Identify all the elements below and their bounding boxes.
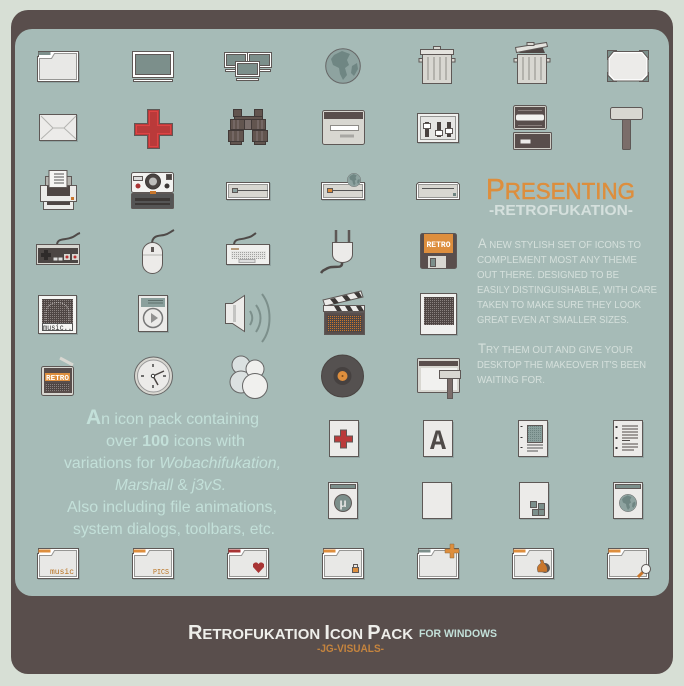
icon: keyboard	[226, 233, 271, 266]
text block: description: GREAT EVEN AT SMALLER SIZES.	[477, 314, 629, 326]
icon: globe	[326, 49, 360, 83]
icon: music image: music..	[43, 323, 72, 333]
icon: picture frame with corners	[608, 50, 648, 82]
text block: pack summary: Marshall & j3vS.	[115, 477, 226, 494]
text block: description: A NEW STYLISH SET OF ICONS TO	[478, 235, 641, 251]
icon: PNG image	[420, 294, 458, 336]
icon: new folder	[418, 544, 460, 580]
icon: floppy disk	[420, 234, 456, 268]
icon: vinyl record	[322, 355, 364, 397]
icon: music folder	[38, 548, 80, 580]
heading: Retrofukation subtitle: -RETROFUKATION-	[489, 203, 633, 219]
icon: media player	[138, 296, 169, 333]
icon: slider bar	[226, 182, 271, 201]
icon: clock	[134, 357, 172, 395]
icon: slider controls	[418, 114, 460, 144]
icon: favourites folder	[228, 548, 270, 580]
icon: window with hammer	[418, 358, 460, 398]
icon: trash can	[419, 46, 455, 84]
text block: description: COMPLEMENT MOST ANY THEME	[477, 254, 637, 266]
text block: description: DESKTOP THE MAKEOVER IT'S BEEN	[477, 359, 646, 371]
icon: red cross	[134, 110, 172, 148]
icon: power plug	[321, 230, 352, 273]
icon: clapperboard	[323, 291, 364, 334]
icon: font document	[424, 420, 454, 458]
text block: description: OUT THERE. DESIGNED TO BE	[477, 269, 619, 281]
text block: pack summary: variations for Wobachifukation,	[64, 455, 281, 472]
icon: blocks document	[520, 482, 550, 520]
icon: binoculars	[228, 110, 268, 144]
icon: notes with text	[614, 420, 644, 458]
inner teal panel	[15, 29, 669, 596]
icon: blank document	[422, 482, 453, 520]
icon: folder	[38, 52, 80, 83]
text block: description: EASILY DISTINGUISHABLE, WITH CARE	[477, 284, 657, 296]
text block: pack summary	[64, 406, 281, 538]
icon: notes with image	[518, 420, 549, 458]
icon: pictures folder: PICS	[153, 569, 169, 577]
icon: music folder: music	[50, 568, 74, 577]
icon: torrent document	[328, 482, 359, 520]
icon: optical drive	[416, 182, 460, 200]
footer platform note: FOR WINDOWS	[419, 628, 497, 640]
icon: mouse	[142, 230, 174, 274]
icon: instant camera	[132, 172, 174, 208]
icon: speaker	[226, 294, 270, 342]
icon: font document: A	[430, 427, 446, 458]
icon: hammer	[610, 108, 642, 150]
icon: radio	[42, 358, 74, 396]
icon: floppy disk: RETRO	[426, 241, 451, 250]
heading: Presenting: PRESENTING	[486, 174, 635, 206]
icon: open trash can	[514, 42, 550, 84]
text block: pack summary: over 100 icons with	[106, 433, 245, 450]
footer title: RETROFUKATION ICON PACK	[188, 622, 413, 644]
icon: search folder	[608, 548, 650, 580]
icon: music image	[38, 296, 78, 335]
icon: pictures folder	[132, 548, 175, 580]
icon: printer	[40, 170, 76, 210]
icon: network of monitors	[224, 52, 272, 80]
text block: description: TAKEN TO MAKE SURE THEY LOOK	[477, 299, 641, 311]
text block: description	[477, 235, 657, 386]
icon: web document	[614, 482, 644, 520]
icon: user folder	[512, 548, 555, 580]
icon: torrent document: μ	[339, 496, 347, 510]
icon: user group	[230, 356, 268, 398]
icon: locked folder	[322, 548, 365, 580]
icon: game controller	[36, 233, 80, 264]
icon: application window	[322, 110, 364, 144]
icon: monitor	[132, 52, 174, 82]
text block: description: WAITING FOR.	[477, 374, 545, 386]
text block: pack summary: Also including file animations,	[67, 499, 277, 516]
footer credit: -JG-VISUALS-	[317, 643, 384, 655]
icon: slider bar with globe	[322, 173, 366, 201]
icon: envelope	[40, 114, 78, 142]
icon: document with cross	[330, 420, 360, 458]
text block: pack summary: system dialogs, toolbars, etc.	[73, 521, 275, 538]
text block: pack summary: An icon pack containing	[86, 406, 259, 429]
text block: description: TRY THEM OUT AND GIVE YOUR	[478, 340, 633, 356]
icon: radio: RETRO	[46, 375, 69, 383]
icon: stacked drives	[514, 106, 552, 150]
